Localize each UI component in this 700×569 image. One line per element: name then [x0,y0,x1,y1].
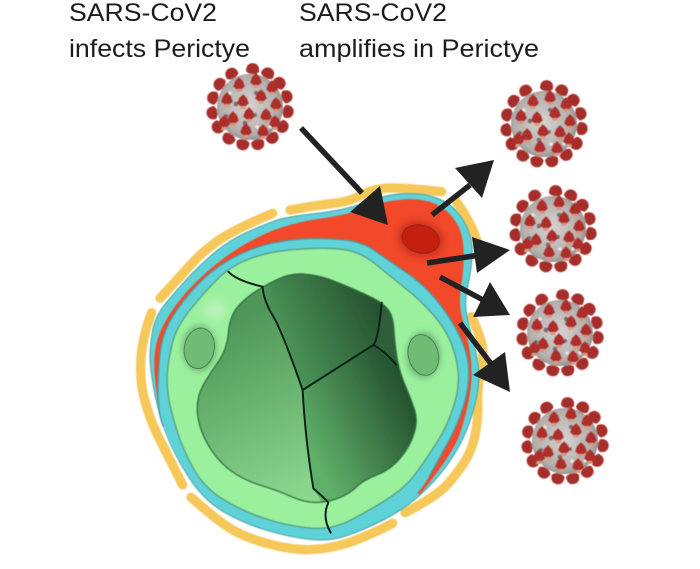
arrow: release 3 [440,277,510,317]
label: amplifies [299,0,539,63]
lumen [196,272,418,504]
virus: released 3 [516,289,604,377]
virus: infecting [206,63,294,151]
arrow: release 4 [460,323,510,392]
endothelial nucleus: right [404,331,443,379]
pale smudge [203,301,227,319]
virus: released 4 [521,397,609,485]
label: infects [69,0,250,63]
label: infects: infects Perictye [69,35,250,63]
endothelial nucleus: left [181,325,218,372]
label: amplifies: amplifies in Perictye [299,35,539,63]
capillary cross-section [141,188,483,550]
pericyte nucleus [393,215,449,263]
pericyte: red layer [154,199,472,494]
virus: released 1 [500,80,588,168]
arrow: entry into pericyte [301,128,388,225]
inner cyan layer [158,239,469,534]
virus: released 2 [509,185,597,273]
endothelium: light green [167,248,458,528]
arrow: release 1 [432,160,494,215]
outer cyan basement layer [150,194,479,540]
arrow: release 2 [427,237,510,273]
cell junctions [228,272,397,533]
endfeet: yellow segments [141,188,483,550]
infographic [70,3,610,555]
